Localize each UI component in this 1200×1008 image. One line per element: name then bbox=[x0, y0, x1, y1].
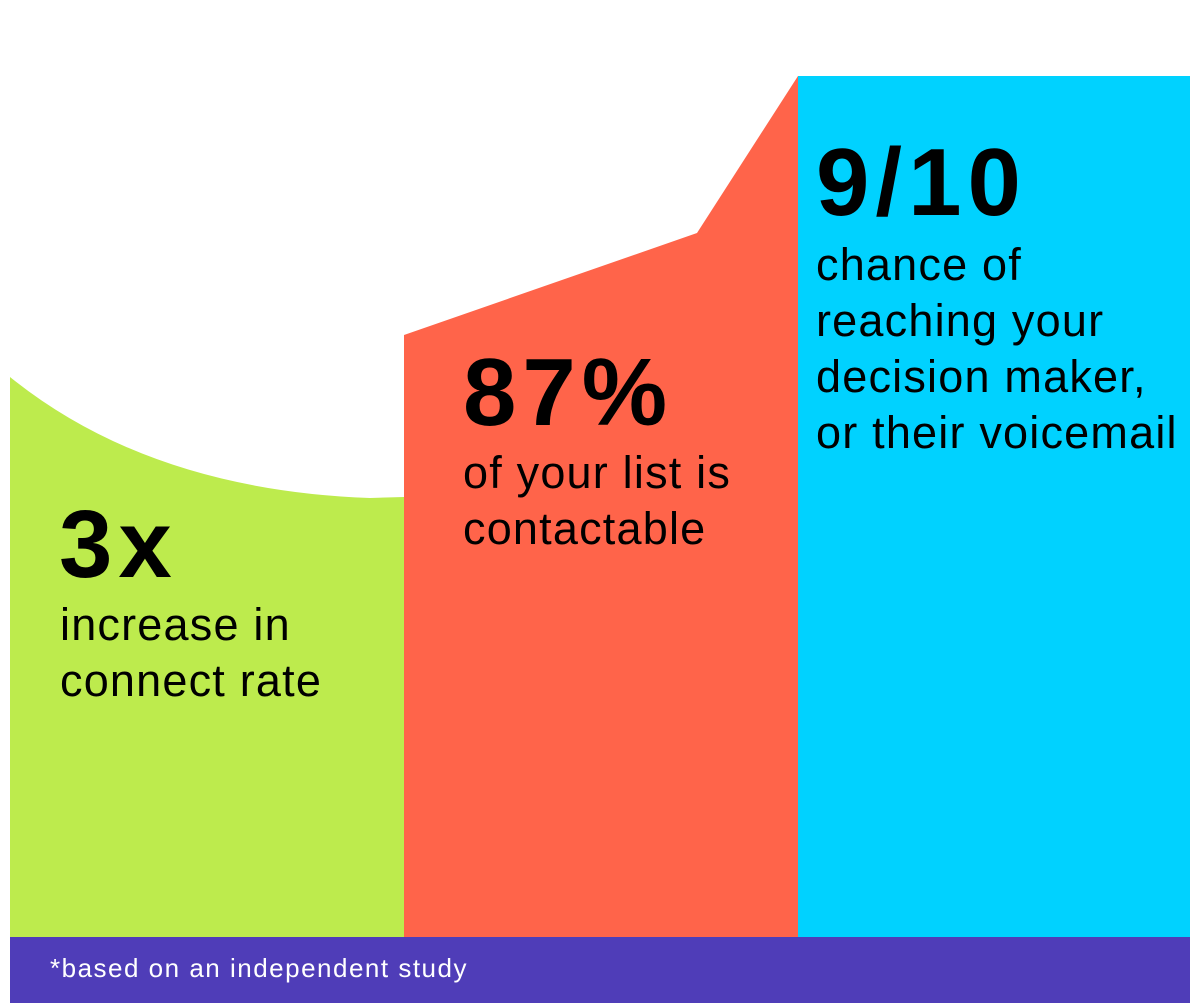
panel: blue 9/10 bbox=[798, 76, 1190, 937]
panel: green 3x bbox=[10, 377, 404, 937]
text: chance of reaching: chance of bbox=[816, 239, 1022, 290]
text: chance of reaching: decision maker, bbox=[816, 351, 1147, 402]
footnote: *based on an independent study bbox=[50, 953, 468, 983]
stat: 87%: 87% bbox=[463, 339, 673, 446]
text: chance of reaching bbox=[816, 239, 1178, 458]
text: of your list is contactable: contactable bbox=[463, 503, 706, 554]
text: increase in connect rate: increase in bbox=[60, 599, 291, 650]
text: of your list is contactable: of your list is bbox=[463, 447, 731, 498]
stat: 9/10: 9/10 bbox=[816, 129, 1027, 236]
text: chance of reaching: or their voicemail bbox=[816, 407, 1178, 458]
text: chance of reaching: reaching your bbox=[816, 295, 1104, 346]
footer bar bbox=[10, 937, 1190, 1003]
text: of your list is contactable bbox=[463, 447, 731, 554]
panel: red 87% bbox=[404, 76, 798, 937]
stat: 3x: 3x bbox=[59, 491, 178, 598]
text: increase in connect rate bbox=[60, 599, 322, 706]
text: increase in connect rate: connect rate bbox=[60, 655, 322, 706]
